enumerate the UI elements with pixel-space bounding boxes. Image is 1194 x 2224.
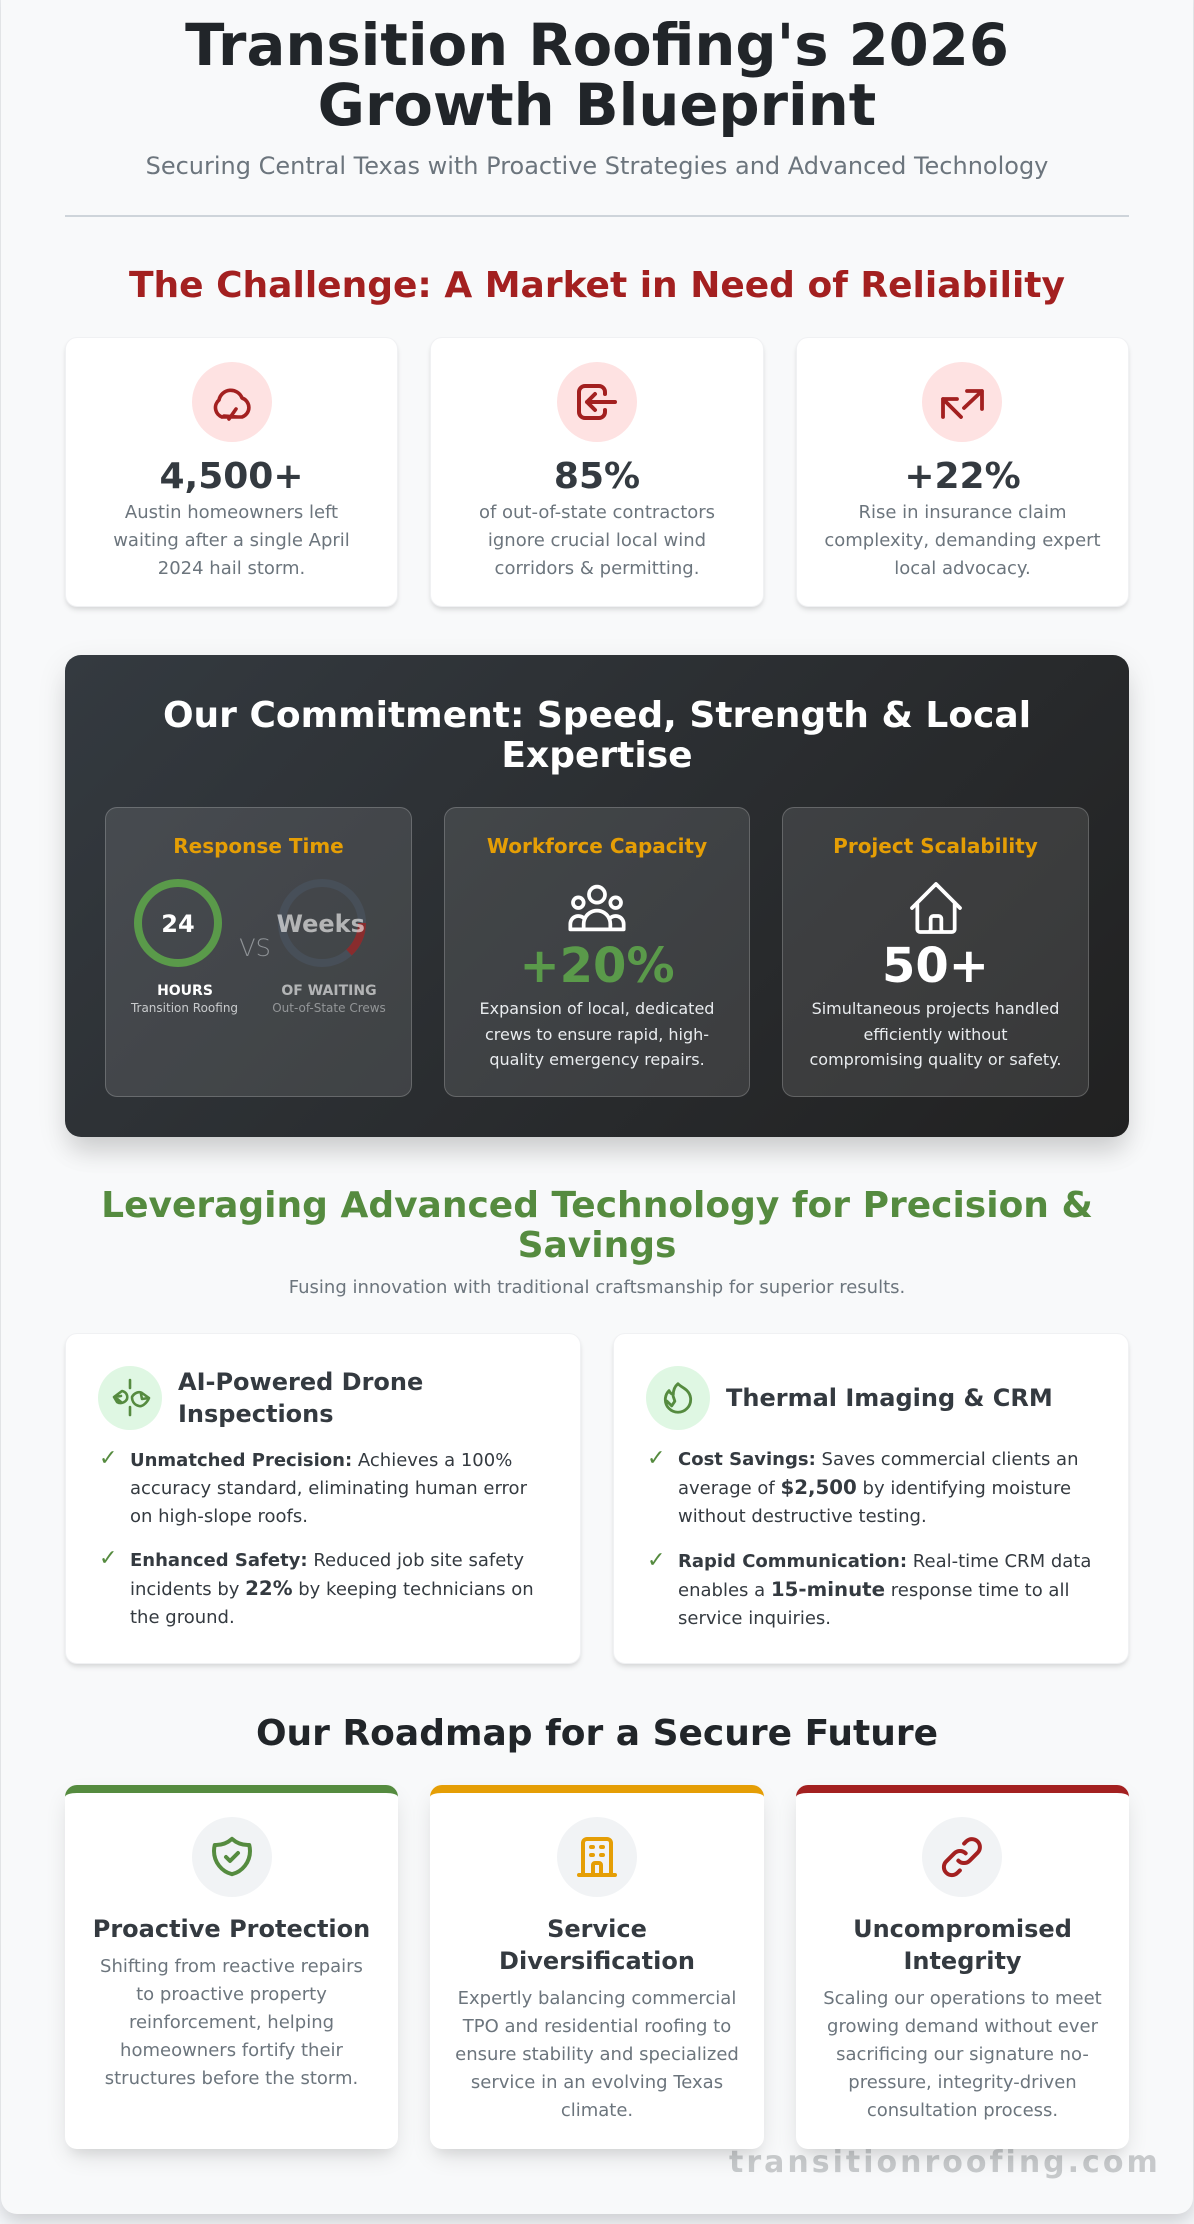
card title: Integrity: [903, 1947, 1022, 1975]
card description: service in an evolving Texas: [471, 2072, 723, 2093]
stat description: Expansion of local, dedicated: [480, 999, 714, 1018]
card title: Service: [547, 1915, 647, 1943]
heading: technology: Leveraging Advanced Technology for Precision &: [101, 1185, 1093, 1226]
stat description: waiting after a single April: [113, 530, 350, 550]
card title: Uncompromised: [853, 1915, 1072, 1943]
subtitle: Securing Central Texas with Proactive Strategies and Advanced Technology: [146, 152, 1048, 180]
icon: storm cloud: [192, 362, 272, 442]
card description: sacrificing our signature no-: [836, 2044, 1089, 2065]
card description: ensure stability and specialized: [455, 2044, 739, 2065]
icon: people group: [568, 884, 626, 932]
sub-panel: response time: [105, 807, 412, 1097]
bullet: unmatched precision: [130, 1450, 527, 1526]
stat description: complexity, demanding expert: [824, 530, 1101, 550]
stat description: ignore crucial local wind: [488, 530, 706, 550]
stat description: quality emergency repairs.: [489, 1050, 705, 1069]
card title: [853, 1915, 1072, 1975]
bullet: rapid communication: [678, 1551, 1091, 1629]
label: transition roofing: Transition Roofing: [131, 1001, 238, 1015]
panel: commitment: [65, 655, 1129, 1137]
card heading: Inspections: [178, 1400, 334, 1428]
label: hours: HOURS: [157, 983, 213, 999]
stat description: Simultaneous projects handled: [812, 999, 1059, 1018]
icon: login arrow: [557, 362, 637, 442]
panel: thermal imaging and CRM: [613, 1333, 1129, 1664]
card description: structures before the storm.: [105, 2068, 358, 2089]
card description: Expertly balancing commercial: [458, 1988, 736, 2009]
sub-panel: workforce capacity: [444, 807, 750, 1097]
card title: Diversification: [499, 1947, 695, 1975]
card description: reinforcement, helping: [129, 2012, 334, 2033]
ring value: 24: 24: [161, 910, 195, 938]
icon: house: [910, 882, 962, 934]
card description: Scaling our operations to meet: [823, 1988, 1102, 2009]
heading: commitment: [163, 694, 1031, 776]
stat description: [824, 502, 1101, 578]
bullet: enhanced safety: incidents by 22% by keeping technicians on: [130, 1577, 534, 1600]
card description: [823, 1988, 1102, 2121]
stat description: efficiently without: [864, 1025, 1007, 1044]
stat description: [113, 502, 350, 578]
title: Transition Roofing's 2026: [185, 12, 1009, 79]
check mark: ✓: [99, 1446, 117, 1471]
check mark: ✓: [647, 1548, 665, 1573]
stat description: Austin homeowners left: [125, 502, 338, 522]
bullet: cost savings: average of $2,500 by identifying moisture: [678, 1476, 1071, 1499]
stat description: Rise in insurance claim: [858, 502, 1066, 522]
card heading: [178, 1368, 423, 1428]
card title: Proactive Protection: [93, 1915, 370, 1943]
watermark: transitionroofing.com: [729, 2145, 1161, 2180]
icon: thermal flame: [646, 1366, 710, 1430]
title: [185, 12, 1009, 139]
panel: uncompromised integrity: [796, 1785, 1129, 2149]
panel: AI drone inspections: [65, 1333, 581, 1664]
label: of waiting: OF WAITING: [281, 983, 377, 999]
bullet: enhanced safety: Enhanced Safety: Reduced job site safety: [130, 1550, 524, 1571]
heading: commitment: Our Commitment: Speed, Strength & Local: [163, 694, 1031, 736]
stat description: compromising quality or safety.: [810, 1050, 1061, 1069]
sub-panel: project scalability: [782, 807, 1089, 1097]
panel: proactive protection: [65, 1785, 398, 2149]
icon: office building: [557, 1817, 637, 1897]
stat description: [810, 999, 1061, 1069]
heading: roadmap: Our Roadmap for a Secure Future: [256, 1713, 938, 1754]
bullet: cost savings: without destructive testing.: [678, 1506, 927, 1527]
label: out-of-state crews: Out-of-State Crews: [272, 1001, 386, 1015]
card heading: Workforce Capacity: [487, 834, 707, 858]
bullet: rapid communication: enables a 15-minute response time to all: [678, 1578, 1069, 1601]
bullet: enhanced safety: the ground.: [130, 1607, 235, 1628]
icon: chain link: [922, 1817, 1002, 1897]
card description: homeowners fortify their: [120, 2040, 343, 2061]
vs label: VS: [239, 934, 271, 962]
panel: challenge stat 85%: [430, 337, 764, 607]
bullet: cost savings: Cost Savings: Saves commercial clients an: [678, 1449, 1078, 1470]
card title: [499, 1915, 695, 1975]
card heading: Response Time: [173, 834, 344, 858]
stat description: of out-of-state contractors: [479, 502, 715, 522]
bullet: rapid communication: service inquiries.: [678, 1608, 831, 1629]
stat description: local advocacy.: [894, 558, 1031, 578]
card description: climate.: [561, 2100, 633, 2121]
card heading: Project Scalability: [833, 834, 1038, 858]
bullet: enhanced safety: [130, 1550, 534, 1628]
card description: [455, 1988, 739, 2121]
stat number: 4,500+: [159, 456, 304, 497]
bullet: cost savings: [678, 1449, 1078, 1527]
panel: challenge stat +22%: [796, 337, 1129, 607]
icon: shield check: [192, 1817, 272, 1897]
panel: service diversification: [430, 1785, 764, 2149]
bullet: rapid communication: Rapid Communication: Real-time CRM data: [678, 1551, 1091, 1572]
stat description: corridors & permitting.: [495, 558, 699, 578]
icon: drone: [98, 1366, 162, 1430]
stat description: 2024 hail storm.: [158, 558, 305, 578]
card description: pressure, integrity-driven: [848, 2072, 1077, 2093]
card heading: AI-Powered Drone: [178, 1368, 423, 1396]
heading: technology: Savings: [518, 1225, 676, 1266]
stat: 50+: 50+: [882, 938, 989, 994]
ring: 24 hours: [134, 879, 222, 967]
card description: growing demand without ever: [827, 2016, 1098, 2037]
stat description: crews to ensure rapid, high-: [485, 1025, 709, 1044]
ring: weeks: [278, 879, 366, 967]
panel: challenge stat 4,500+: [65, 337, 398, 607]
card description: consultation process.: [867, 2100, 1058, 2121]
ring value: weeks: Weeks: [276, 910, 365, 938]
technology subheading: Fusing innovation with traditional craftsmanship for superior results.: [289, 1276, 905, 1298]
card description: to proactive property: [136, 1984, 327, 2005]
icon: diverging arrows: [922, 362, 1002, 442]
stat number: +22%: [904, 456, 1021, 497]
heading: technology: [101, 1185, 1093, 1266]
check mark: ✓: [99, 1546, 117, 1571]
stat description: [480, 999, 714, 1069]
card heading: Thermal Imaging & CRM: [726, 1384, 1053, 1412]
card description: Shifting from reactive repairs: [100, 1956, 363, 1977]
bullet: unmatched precision: Unmatched Precision: Achieves a 100%: [130, 1450, 512, 1470]
check mark: ✓: [647, 1446, 665, 1471]
bullet: unmatched precision: on high-slope roofs.: [130, 1506, 308, 1526]
stat number: 85%: [554, 456, 640, 497]
stat description: [479, 502, 715, 578]
card description: TPO and residential roofing to: [463, 2016, 731, 2037]
heading: the challenge: The Challenge: A Market in Need of Reliability: [129, 264, 1065, 306]
card description: [100, 1956, 363, 2089]
bullet: unmatched precision: accuracy standard, eliminating human error: [130, 1478, 527, 1498]
title: Growth Blueprint: [318, 72, 876, 139]
stat: +20%: +20%: [519, 938, 675, 994]
heading: commitment: Expertise: [501, 734, 693, 776]
